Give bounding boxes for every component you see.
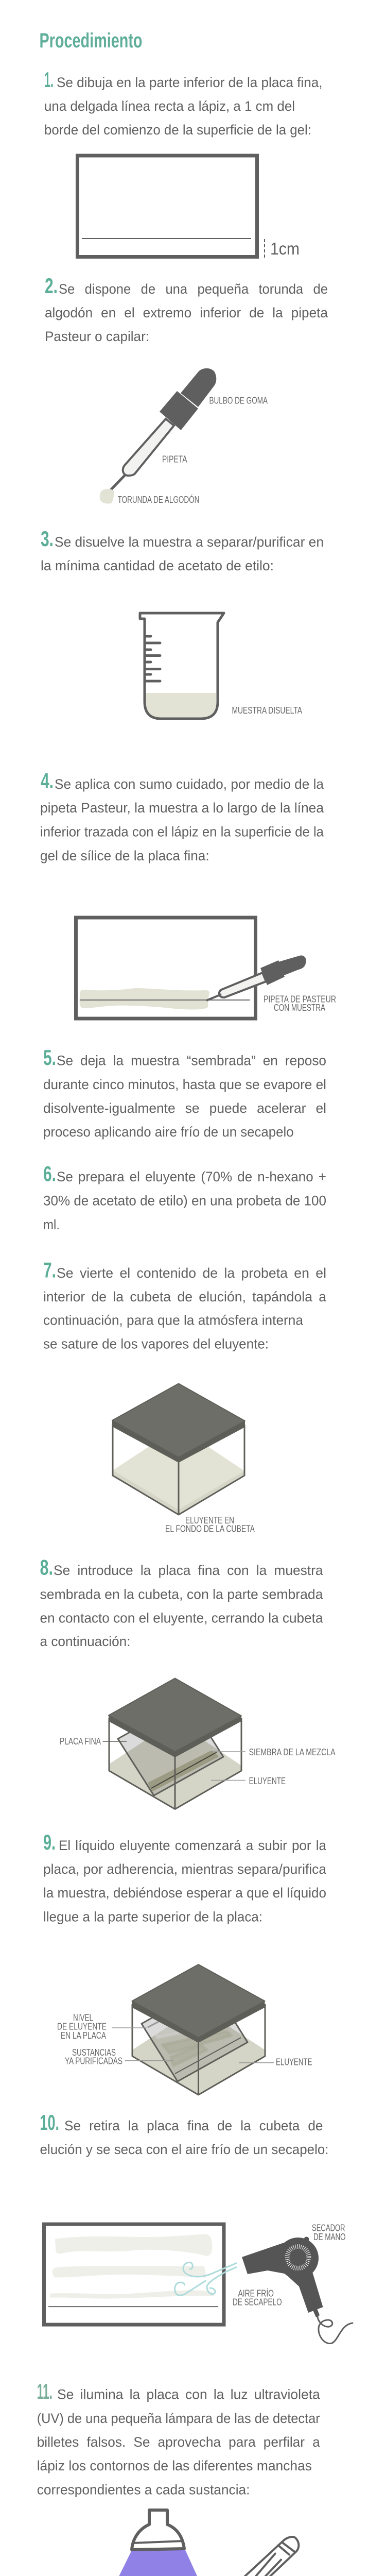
step 10	[40, 2110, 353, 2344]
step number 11: 11.	[37, 2379, 52, 2403]
label: aire frío: AIRE FRÍO	[238, 2288, 274, 2298]
step 4 text: gel de sílice de la placa fina:	[40, 848, 209, 863]
label: eluyente: ELUYENTE	[276, 2057, 312, 2067]
step 4 text: inferior trazada con el lápiz en la superficie de la	[40, 824, 324, 840]
step 11 text: lápiz los contornos de las diferentes manchas	[37, 2458, 312, 2473]
step 2 text: Se dispone de una pequeña torunda de	[59, 281, 328, 297]
step 8 text: a continuación:	[40, 1634, 131, 1649]
step 7 text: Se vierte el contenido de la probeta en el	[57, 1265, 326, 1281]
label: muestra disuelta: MUESTRA DISUELTA	[232, 705, 302, 716]
step 9	[43, 1830, 327, 2095]
step 7 text: continuación, para que la atmósfera interna	[43, 1313, 304, 1328]
label: sustancias ya purificadas: YA PURIFICADAS	[65, 2056, 122, 2066]
label: nivel de eluyente	[57, 2012, 147, 2041]
label: pipeta: PIPETA	[162, 454, 187, 465]
step 2	[45, 274, 328, 505]
step 1	[44, 67, 322, 258]
step 10 text: Se retira la placa fina de la cubeta de	[64, 2118, 323, 2133]
label: pipeta de pasteur	[264, 994, 336, 1013]
step 5 text: durante cinco minutos, hasta que se evapore el	[43, 1077, 326, 1092]
label: bulbo de goma: BULBO DE GOMA	[209, 396, 268, 406]
step 11 text: correspondientes a cada sustancia:	[37, 2482, 250, 2498]
step 8	[40, 1555, 336, 1809]
step 1 text: Se dibuja en la parte inferior de la placa fina,	[57, 75, 322, 90]
label: aire frío: DE SECAPELO	[233, 2297, 282, 2308]
step 5 text: disolvente-igualmente se puede acelerar el	[43, 1100, 326, 1116]
step 2 text: Pasteur o capilar:	[45, 329, 149, 344]
label: siembra de la mezcla: SIEMBRA DE LA MEZCLA	[249, 1747, 336, 1757]
step 9 text: placa, por adherencia, mientras separa/purifica	[43, 1861, 327, 1877]
step 3 text: la mínima cantidad de acetato de etilo:	[41, 558, 274, 573]
label: aire frío	[233, 2288, 282, 2308]
illustration: plate with hair dryer	[44, 2223, 353, 2344]
step number 4: 4.	[41, 769, 54, 793]
step 9 text: llegue a la parte superior de la placa:	[43, 1909, 262, 1925]
step 2 text	[45, 281, 328, 344]
step 7	[43, 1258, 327, 1534]
step number 7: 7.	[43, 1258, 56, 1282]
label: torunda: TORUNDA DE ALGODÓN	[118, 494, 199, 505]
step number 10: 10.	[40, 2110, 59, 2134]
step 5	[43, 1045, 326, 1140]
step 7 text: interior de la cubeta de elución, tapándola a	[43, 1289, 327, 1304]
step 7 text	[43, 1265, 327, 1352]
illustration: plate with pencil line	[77, 156, 300, 258]
step number 3: 3.	[41, 527, 54, 551]
label: secador de mano	[312, 2223, 346, 2242]
step number 1: 1.	[44, 67, 54, 92]
step 10 text: elución y se seca con el aire frío de un secapelo:	[40, 2142, 328, 2157]
step 1 text	[44, 75, 322, 138]
illustration: plate being seeded with pipette	[76, 918, 336, 1019]
illustration: pipette	[100, 368, 268, 505]
step 6 text: Se prepara el eluyente (70% de n-hexano +	[57, 1169, 326, 1184]
step number 2: 2.	[45, 274, 58, 298]
step 3 text	[41, 534, 324, 573]
step number 8: 8.	[40, 1555, 53, 1580]
title: Procedimiento	[39, 29, 142, 52]
step 11 text: Se ilumina la placa con la luz ultravioleta	[57, 2387, 321, 2402]
illustration: plate with pencil line: 1cm	[270, 239, 300, 258]
step 11 text: billetes falsos. Se aprovecha para perfilar a	[37, 2434, 321, 2450]
label: sustancias ya purificadas: SUSTANCIAS	[72, 2047, 116, 2058]
label: placa fina: PLACA FINA	[60, 1736, 101, 1747]
label: secador de mano: SECADOR	[312, 2223, 345, 2233]
illustration: chamber with seeded plate	[60, 1679, 336, 1809]
label: nivel de eluyente: DE ELUYENTE	[57, 2022, 107, 2032]
label: pipeta de pasteur: CON MUESTRA	[274, 1003, 325, 1013]
icon: pencil	[238, 2537, 299, 2576]
step 11 text: (UV) de una pequeña lámpara de las de detectar	[37, 2411, 320, 2426]
step 9 text: El líquido eluyente comenzará a subir por la	[59, 1838, 327, 1853]
step 5 text: proceso aplicando aire frío de un secapelo	[43, 1124, 294, 1140]
step 8 text: Se introduce la placa fina con la muestra	[54, 1563, 323, 1578]
step 5 text	[43, 1053, 326, 1140]
step 3	[41, 527, 324, 719]
label: nivel de eluyente: NIVEL	[73, 2012, 93, 2023]
illustration: beaker	[140, 613, 302, 719]
label: pipeta de pasteur: PIPETA DE PASTEUR	[264, 994, 336, 1005]
illustration: chamber with eluted plate	[57, 1964, 312, 2095]
illustration: elution chamber with eluent	[112, 1384, 255, 1534]
step 6 text: 30% de acetato de etilo) en una probeta de 100	[43, 1193, 326, 1209]
step 4 text: pipeta Pasteur, la muestra a lo largo de la línea	[40, 800, 324, 816]
label: eluyente en el fondo: ELUYENTE EN	[185, 1515, 234, 1526]
icon: UV lamp beam	[67, 2550, 245, 2576]
step 1 text: borde del comienzo de la superficie de la gel:	[44, 122, 311, 138]
illustration: UV lamp over plate	[119, 2509, 300, 2576]
step 8 text: sembrada en la cubeta, con la parte sembrada	[40, 1587, 323, 1602]
step 8 text	[40, 1563, 323, 1649]
step 6 text	[43, 1169, 326, 1232]
step number 6: 6.	[43, 1161, 56, 1186]
step 7 text: se sature de los vapores del eluyente:	[43, 1336, 269, 1352]
icon: UV lamp	[132, 2510, 184, 2550]
step number 9: 9.	[43, 1830, 56, 1854]
step number 5: 5.	[43, 1045, 56, 1070]
label: eluyente: ELUYENTE	[249, 1776, 286, 1786]
step 4 text: Se aplica con sumo cuidado, por medio de la	[55, 776, 324, 792]
label: sustancias ya purificadas	[65, 2047, 173, 2066]
step 6	[43, 1161, 326, 1232]
step 11	[37, 2379, 339, 2576]
step 10 text	[40, 2118, 328, 2157]
label: secador de mano: DE MANO	[313, 2232, 346, 2242]
step 4 text	[40, 776, 324, 863]
step 8 text: en contacto con el eluyente, cerrando la cubeta	[40, 1611, 323, 1626]
step 6 text: ml.	[43, 1217, 60, 1232]
step 1 text: una delgada línea recta a lápiz, a 1 cm del	[44, 98, 295, 114]
step 2 text: algodón en el extremo inferior de la pipeta	[45, 305, 328, 320]
icon: hair dryer	[242, 2237, 353, 2344]
step 4	[40, 769, 336, 1019]
label: nivel de eluyente: EN LA PLACA	[61, 2030, 106, 2041]
step 5 text: Se deja la muestra “sembrada” en reposo	[57, 1053, 326, 1069]
label: eluyente en el fondo: EL FONDO DE LA CUBETA	[165, 1524, 255, 1534]
step 3 text: Se disuelve la muestra a separar/purificar en	[55, 534, 324, 550]
step 11 text	[37, 2387, 321, 2498]
step 9 text: la muestra, debiéndose esperar a que el líquido	[43, 1885, 326, 1901]
label: eluyente en el fondo	[165, 1515, 255, 1534]
icon: cold air swirls	[175, 2262, 236, 2295]
step 9 text	[43, 1838, 327, 1925]
